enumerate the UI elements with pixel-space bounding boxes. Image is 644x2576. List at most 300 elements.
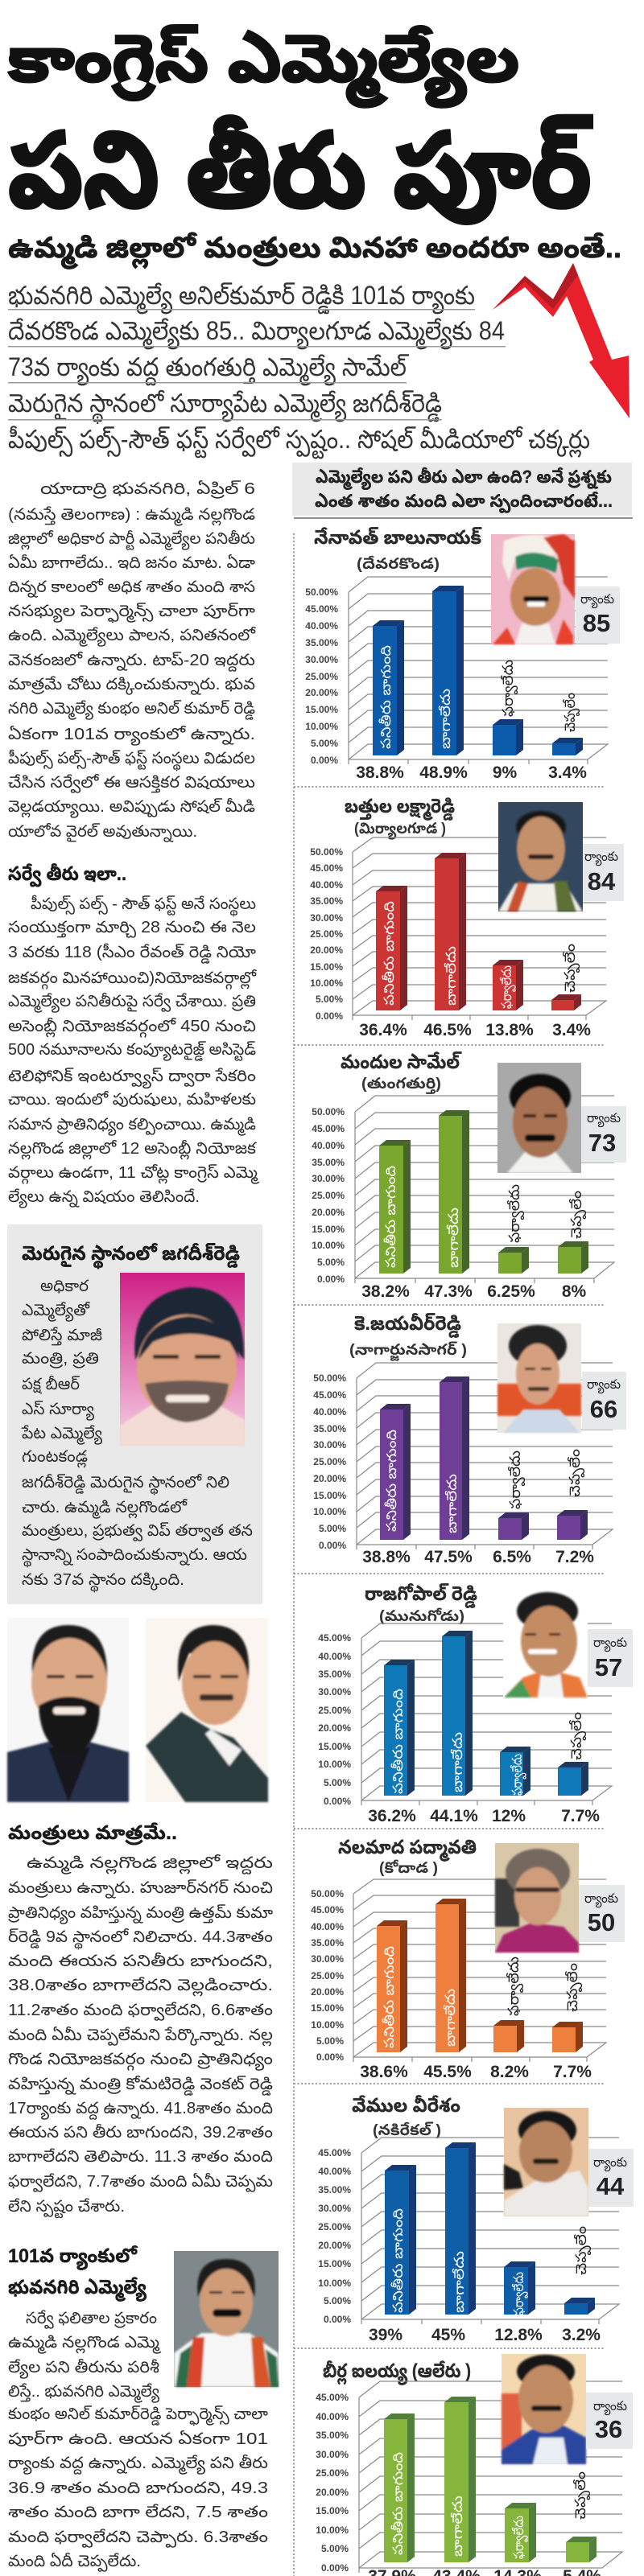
value labels: 36.4% bbox=[359, 1021, 407, 1039]
rank badge: ర్యాంకు bbox=[587, 1112, 621, 1128]
chart 2: Miryalaguda: 35.00% bbox=[310, 895, 343, 907]
chart 7: Nakrekal: 20.00% bbox=[318, 2240, 351, 2251]
chart 3: Thungathurthi: 5.00% bbox=[317, 1257, 345, 1268]
value labels bbox=[368, 1807, 600, 1825]
bars: ఫర్వాలేదు bbox=[506, 1184, 525, 1243]
chart 2: Miryalaguda: 20.00% bbox=[310, 944, 343, 956]
bars: బాగాలేదు bbox=[438, 689, 453, 749]
photo: Ilaiah bbox=[502, 2354, 586, 2464]
value labels bbox=[356, 763, 587, 782]
article survey text: జకవర్గం మినహాయించి)నియోజకవర్గాల్లో bbox=[8, 969, 257, 990]
text: Jagadish Reddy column: మంత్రి, ప్రతి bbox=[22, 1350, 99, 1368]
chart 1: Devarakonda: 25.00% bbox=[305, 671, 338, 682]
article intro text: యాదాద్రి భువనగిరి, ఏప్రిల్ 6 bbox=[40, 480, 255, 499]
icon: falling red arrow bbox=[493, 263, 630, 418]
bars: చెప్పలేం bbox=[567, 1449, 585, 1497]
heading bbox=[341, 1051, 462, 1094]
bars: బాగాలేదు bbox=[443, 1989, 458, 2047]
heading: rank 101 Bhuvanagiri MLA bbox=[8, 2245, 147, 2302]
deck headlines: మెరుగైన స్థానంలో సూర్యాపేట ఎమ్మెల్యే జగదీశ్‌రెడ్డి bbox=[8, 389, 442, 424]
photo: minister Uttam Kumar Reddy bbox=[7, 1618, 129, 1802]
chart 3: Thungathurthi: 50.00% bbox=[312, 1106, 345, 1117]
photo: Padmavathi bbox=[495, 1843, 579, 1953]
bars: పనితీరు బాగుంది bbox=[378, 645, 394, 749]
article ministers text: 38.0శాతం బాగాలేదని వెల్లడించారు. bbox=[8, 1977, 273, 1997]
chart 8: Aleru: 35.00% bbox=[316, 2430, 349, 2441]
chart 5: Munugode: 10.00% bbox=[318, 1759, 351, 1770]
text: Jagadish Reddy column: మంత్రులు, ప్రభుత్వ విప్ తర్వాత తన bbox=[22, 1522, 253, 1541]
article intro text: వెనకంజలో ఉన్నారు. టాప్-20 ఇద్దరు bbox=[8, 652, 255, 672]
chart 8: Aleru: 10.00% bbox=[316, 2525, 349, 2536]
chart 3: Thungathurthi: 10.00% bbox=[312, 1240, 345, 1251]
chart 2: Miryalaguda: 0.00% bbox=[316, 1010, 343, 1022]
chart 4: Nagarjuna Sagar: 35.00% bbox=[313, 1423, 346, 1434]
value labels: 38.8% bbox=[356, 763, 404, 782]
value labels: 38.8% bbox=[362, 1548, 411, 1566]
chart 5: Munugode: 5.00% bbox=[324, 1777, 351, 1788]
chart 2: Miryalaguda: 15.00% bbox=[310, 961, 343, 973]
article intro text: దిన్నర కాలంలో అధిక శాతం మంది శాస bbox=[8, 578, 255, 598]
chart 4: Nagarjuna Sagar: 45.00% bbox=[313, 1389, 346, 1401]
heading: మందుల సామేల్ bbox=[341, 1051, 462, 1073]
bars: ఫర్వాలేదు bbox=[510, 1754, 526, 1796]
bars: చెప్పలేం bbox=[568, 1191, 587, 1239]
article ministers text: మంది ఈయన పనితీరు బాగుందని, bbox=[8, 1952, 273, 1970]
bars: ఫర్వాలేదు bbox=[506, 1957, 524, 2016]
bars: ఫర్వాలేదు bbox=[511, 2272, 528, 2315]
chart 4: Nagarjuna Sagar bbox=[313, 1313, 626, 1566]
chart 8: Aleru: 30.00% bbox=[316, 2449, 349, 2460]
bars: పనితీరు బాగుంది bbox=[382, 901, 397, 1006]
chart 4: Nagarjuna Sagar: 15.00% bbox=[313, 1490, 346, 1501]
rank badge bbox=[586, 2393, 633, 2449]
rank badge: 44 bbox=[597, 2172, 625, 2200]
article intro text: నగిరి ఎమ్మెల్యే కుంభం అనిల్ కుమార్ రెడ్డి bbox=[8, 700, 255, 720]
text: Jagadish Reddy column: అధికార bbox=[40, 1278, 89, 1295]
deck headlines bbox=[8, 281, 590, 459]
chart 1: Devarakonda: 50.00% bbox=[305, 586, 338, 598]
heading: కె.జయవీర్‌రెడ్డి bbox=[354, 1313, 461, 1338]
chart 8: Aleru: 20.00% bbox=[316, 2487, 349, 2498]
article rank 101 text: పూర్‌గా ఉంది. ఆయన ఏకంగా 101 bbox=[8, 2430, 268, 2448]
rank badge: ర్యాంకు bbox=[593, 1636, 627, 1652]
article ministers text: ఫర్వాలేదని, 7.7శాతం మంది ఏమీ చెప్పమ bbox=[8, 2172, 273, 2192]
value labels: 38.6% bbox=[360, 2063, 408, 2081]
rank badge: ర్యాంకు bbox=[593, 2156, 627, 2172]
article ministers text: ర్‌రెడ్డి 9వ స్థానంలో నిలిచారు. 44.3శాతం bbox=[8, 1928, 273, 1950]
article rank 101 text: ఉమ్మడి నల్లగొండ ఎమ్మె bbox=[8, 2334, 162, 2354]
article ministers text bbox=[7, 1854, 273, 2219]
value labels: 3.2% bbox=[562, 2326, 601, 2344]
chart 3: Thungathurthi: 35.00% bbox=[312, 1157, 345, 1168]
chart 4: Nagarjuna Sagar: 30.00% bbox=[313, 1439, 346, 1451]
chart 2: Miryalaguda: 5.00% bbox=[316, 994, 343, 1005]
value labels: 38.2% bbox=[361, 1282, 410, 1301]
heading: survey: సర్వే తీరు ఇలా.. bbox=[8, 863, 126, 887]
chart 4: Nagarjuna Sagar: 25.00% bbox=[313, 1456, 346, 1467]
chart 4: Nagarjuna Sagar: 0.00% bbox=[319, 1540, 346, 1551]
panel: survey question banner: ఎంత శాతం మంది ఎలా స్పందించారంటే... bbox=[315, 491, 613, 513]
chart 2: Miryalaguda: 50.00% bbox=[310, 846, 343, 858]
rank badge bbox=[588, 2149, 634, 2207]
chart 3: Thungathurthi: 25.00% bbox=[312, 1190, 345, 1201]
bars bbox=[377, 1899, 583, 2052]
value labels: 45% bbox=[431, 2326, 465, 2344]
chart 1: Devarakonda: 20.00% bbox=[305, 687, 338, 698]
title bbox=[8, 23, 592, 229]
article survey text: అసెంబ్లీ నియోజకవర్గంలో 450 నుంచి bbox=[8, 1017, 256, 1038]
article rank 101 text: సర్వే ఫలితాల ప్రకారం bbox=[26, 2310, 157, 2329]
bars: చెప్పలేం bbox=[573, 2226, 592, 2275]
text: Jagadish Reddy column: చారు. ఉమ్మడి నల్లగొండలో bbox=[22, 1499, 188, 1519]
deck headlines: దేవరకొండ ఎమ్మెల్యేకు 85.. మిర్యాలగూడ ఎమ్మెల్యేకు 84 bbox=[8, 316, 505, 350]
rank badge: 84 bbox=[588, 867, 616, 895]
value labels: 9% bbox=[493, 763, 517, 782]
article intro text: నసభ్యుల పెర్ఫార్మెన్స్ చాలా పూర్‌గా bbox=[8, 603, 256, 623]
rank badge: ర్యాంకు bbox=[593, 2400, 627, 2416]
heading bbox=[314, 527, 482, 573]
chart 4: Nagarjuna Sagar: 40.00% bbox=[313, 1406, 346, 1418]
article intro text: ఏకంగా 101వ ర్యాంకులో ఉన్నారు. bbox=[8, 726, 255, 746]
chart 8: Aleru bbox=[316, 2354, 633, 2576]
text: Jagadish Reddy column: పక్ష బీఆర్ bbox=[22, 1375, 80, 1394]
chart 4: Nagarjuna Sagar: 10.00% bbox=[313, 1506, 346, 1517]
article rank 101 text: శాతం మంది బాగా లేదని, 7.5 శాతం bbox=[8, 2504, 268, 2521]
article ministers text: మంది ఏమీ చెప్పలేమని పేర్కొన్నారు. నల్ల bbox=[8, 2026, 273, 2047]
article survey text: 500 నమూనాలను కంప్యూటరైజ్డ్ అసిస్టెడ్ bbox=[8, 1041, 256, 1061]
rank badge bbox=[582, 1372, 626, 1430]
rank badge: 50 bbox=[588, 1908, 615, 1936]
rank badge: 73 bbox=[588, 1129, 616, 1157]
chart 3: Thungathurthi: 30.00% bbox=[312, 1173, 345, 1184]
bars bbox=[384, 2397, 597, 2562]
article intro text: మాత్రమే చోటు దక్కించుకున్నారు. భువ bbox=[8, 676, 255, 695]
bars: ఫర్వాలేదు bbox=[511, 2516, 528, 2559]
chart 2: Miryalaguda: 30.00% bbox=[310, 912, 343, 924]
heading bbox=[349, 1313, 467, 1361]
chart 6: Kodad: 0.00% bbox=[316, 2051, 344, 2063]
title: పని తీరు పూర్ bbox=[8, 112, 592, 229]
bars: ఫర్వాలేదు bbox=[500, 660, 518, 717]
heading bbox=[352, 2095, 460, 2139]
subtitle: ఉమ్మడి జిల్లాలో మంత్రులు మినహా అందరూ అంతే.. bbox=[8, 231, 621, 270]
value labels bbox=[362, 1548, 594, 1566]
chart 5: Munugode: 45.00% bbox=[318, 1632, 351, 1644]
article survey text: సంయుక్తంగా మార్చి 28 నుంచి ఈ నెల bbox=[8, 919, 256, 938]
article rank 101 text: ర్యాంకు వద్ద ఉన్నారు. ఎమ్మెల్యే పని తీరు bbox=[8, 2454, 268, 2475]
chart 3: Thungathurthi: 20.00% bbox=[312, 1207, 345, 1218]
heading: బత్తుల లక్ష్మారెడ్డి bbox=[345, 796, 455, 821]
article survey text: ల్యేలు ఉన్న విషయం తెలిసిందే. bbox=[8, 1188, 200, 1208]
article survey text: వర్గాలు ఉండగా, 11 చోట్ల కాంగ్రెస్ ఎమ్మె bbox=[8, 1164, 260, 1184]
chart 8: Aleru: 25.00% bbox=[316, 2467, 349, 2479]
heading: rank 101 Bhuvanagiri MLA: 101వ ర్యాంకులో bbox=[8, 2245, 138, 2270]
chart 7: Nakrekal: 40.00% bbox=[318, 2166, 351, 2177]
chart 8: Aleru: 5.00% bbox=[321, 2543, 349, 2554]
chart 1: Devarakonda: 10.00% bbox=[305, 721, 338, 732]
chart 8: Aleru: 45.00% bbox=[316, 2392, 349, 2403]
chart 7: Nakrekal: 25.00% bbox=[318, 2221, 351, 2232]
value labels: 3.4% bbox=[552, 1021, 591, 1039]
value labels bbox=[368, 2567, 601, 2576]
article survey text: ఎమ్మెల్యేల పనితీరుపై సర్వే చేశాయి. ప్రతి bbox=[8, 992, 256, 1013]
article rank 101 text: కుంభం అనిల్ కుమార్‌రెడ్డి పెర్ఫార్మెన్స్ చాలా bbox=[8, 2405, 268, 2426]
bars: ఫర్వాలేదు bbox=[499, 965, 516, 1009]
photo: Balu Naik bbox=[491, 534, 575, 644]
article survey text: 3 వరకు 118 (సీఎం రేవంత్ రెడ్డి నియో bbox=[8, 943, 256, 964]
chart 5: Munugode: 40.00% bbox=[318, 1651, 351, 1662]
article ministers text: 11.2శాతం మంది ఫర్వాలేదని, 6.6శాతం bbox=[8, 2002, 273, 2021]
article intro text: ఉంది. ఎమ్మెల్యేలు పాలన, పనితనంలో bbox=[8, 627, 256, 647]
rank badge: 66 bbox=[590, 1395, 617, 1423]
photo: Samel bbox=[497, 1063, 581, 1173]
article rank 101 text: ల్యేల పని తీరును పరిశీ bbox=[8, 2358, 159, 2379]
value labels: 6.5% bbox=[493, 1548, 531, 1566]
chart 1: Devarakonda: 0.00% bbox=[311, 755, 338, 766]
article survey text: టెలిఫోనిక్ ఇంటర్వ్యూస్ ద్వారా సేకరిం bbox=[8, 1068, 256, 1089]
heading bbox=[338, 1837, 477, 1877]
article rank 101 text: మంది ఫర్వాలేదని చెప్పారు. 6.3శాతం bbox=[8, 2529, 268, 2548]
title: కాంగ్రెస్ ఎమ్మెల్యేల bbox=[8, 23, 519, 108]
heading: ministers only: మంత్రులు మాత్రమే.. bbox=[8, 1822, 177, 1846]
deck headlines: భువనగిరి ఎమ్మెల్యే అనిల్‌కుమార్ రెడ్డికి 101వ ర్యాంకు bbox=[8, 281, 475, 315]
value labels: 48.9% bbox=[419, 763, 468, 782]
article intro text: యాలోవ వైరల్ అవుతున్నాయి. bbox=[8, 823, 197, 842]
bars bbox=[385, 2142, 595, 2315]
value labels: 7.2% bbox=[555, 1548, 594, 1566]
value labels bbox=[359, 1021, 591, 1039]
bars: బాగాలేదు bbox=[444, 1474, 460, 1533]
bars: పనితీరు బాగుంది bbox=[390, 2452, 406, 2555]
rank badge: ర్యాంకు bbox=[587, 1378, 621, 1394]
value labels: 8% bbox=[562, 1282, 586, 1301]
heading: (తుంగతుర్తి) bbox=[361, 1076, 441, 1094]
value labels: 47.3% bbox=[424, 1282, 473, 1301]
chart 7: Nakrekal: 45.00% bbox=[318, 2147, 351, 2158]
photo: Jaiveer Reddy bbox=[497, 1323, 581, 1433]
chart 4: Nagarjuna Sagar: 20.00% bbox=[313, 1473, 346, 1484]
article intro text: జిల్లాలో అధికార పార్టీ ఎమ్మెల్యేల పనితీరు bbox=[8, 529, 255, 550]
text: Jagadish Reddy column: ఎమ్మెల్యేతో bbox=[22, 1302, 90, 1322]
chart 6: Kodad: 25.00% bbox=[311, 1970, 344, 1981]
article survey text: నల్లగొండ జిల్లాలో 12 అసెంబ్లీ నియోజక bbox=[8, 1139, 258, 1160]
article rank 101 text: లిస్తే.. భువనగిరి ఎమ్మెల్యే bbox=[8, 2383, 160, 2403]
heading bbox=[345, 796, 455, 840]
chart 3: Thungathurthi: 45.00% bbox=[312, 1123, 345, 1134]
rank badge: 36 bbox=[595, 2415, 622, 2443]
heading: (దేవరకొండ) bbox=[357, 555, 440, 573]
value labels bbox=[361, 1282, 586, 1301]
bars: బాగాలేదు bbox=[444, 946, 459, 1006]
dotted dividers bbox=[294, 533, 604, 2576]
article rank 101 text: మంది ఏదీ చెప్పలేదు. bbox=[8, 2553, 141, 2572]
bars: చెప్పలేం bbox=[564, 1963, 583, 2012]
article rank 101 text: 36.9 శాతం మంది బాగుందని, 49.3 bbox=[8, 2479, 268, 2497]
chart 1: Devarakonda: 5.00% bbox=[311, 738, 338, 749]
chart 1: Devarakonda bbox=[305, 527, 620, 782]
text: Jagadish Reddy column: గుంటకండ్ల bbox=[22, 1448, 88, 1468]
bars: బాగాలేదు bbox=[450, 2496, 465, 2557]
heading: రాజగోపాల్ రెడ్డి bbox=[365, 1583, 477, 1608]
text: Jagadish Reddy column: పోలిస్తే మాజీ bbox=[22, 1327, 102, 1346]
chart 7: Nakrekal: 10.00% bbox=[318, 2278, 351, 2289]
chart 3: Thungathurthi: 15.00% bbox=[312, 1224, 345, 1235]
chart 7: Nakrekal: 0.00% bbox=[324, 2314, 351, 2325]
article survey text: చాయి. ఇందులో పురుషులు, మహిళలకు bbox=[8, 1091, 256, 1109]
chart 6: Kodad: 40.00% bbox=[311, 1921, 344, 1932]
chart 6: Kodad: 30.00% bbox=[311, 1953, 344, 1965]
article intro text bbox=[8, 480, 256, 842]
heading: వేముల వీరేశం bbox=[352, 2095, 460, 2117]
chart 2: Miryalaguda: 40.00% bbox=[310, 879, 343, 891]
chart 6: Kodad: 10.00% bbox=[311, 2019, 344, 2031]
photo: minister Komatireddy Venkat Reddy bbox=[146, 1618, 268, 1802]
article survey text bbox=[8, 895, 260, 1208]
chart 4: Nagarjuna Sagar: 5.00% bbox=[319, 1523, 346, 1534]
heading: rank 101 Bhuvanagiri MLA: భువనగిరి ఎమ్మెల్యే bbox=[8, 2277, 147, 2302]
chart 7: Nakrekal: 30.00% bbox=[318, 2203, 351, 2214]
bars: చెప్పలేం bbox=[562, 944, 580, 993]
heading: బీర్ల ఐలయ్య (ఆలేరు ) bbox=[323, 2360, 471, 2385]
value labels: 12% bbox=[492, 1807, 526, 1825]
article ministers text: ఈయన పని తీరు బాగుందని, 39.2శాతం bbox=[8, 2123, 273, 2142]
bars bbox=[384, 1631, 588, 1796]
deck headlines: పీపుల్స్ పల్స్-సౌత్ ఫస్ట్ సర్వేలో స్పష్టం.. సోషల్ మీడియాలో చక్కర్లు bbox=[8, 425, 590, 459]
chart 3: Thungathurthi bbox=[312, 1051, 626, 1301]
bars: బాగాలేదు bbox=[446, 1208, 461, 1268]
value labels: 12.8% bbox=[494, 2326, 543, 2344]
chart 5: Munugode: 25.00% bbox=[318, 1705, 351, 1716]
article ministers text: ప్రాతినిధ్యం వహిస్తున్న మంత్రి ఉత్తమ్ కుమా bbox=[7, 1904, 273, 1924]
value labels: 47.5% bbox=[424, 1548, 473, 1566]
text: Jagadish Reddy column: జగదీశ్‌రెడ్డి మెరుగైన స్థానంలో నిలి bbox=[22, 1474, 229, 1496]
chart 6: Kodad: 5.00% bbox=[316, 2035, 344, 2047]
chart 1: Devarakonda: 40.00% bbox=[305, 620, 338, 632]
chart 1: Devarakonda: 30.00% bbox=[305, 654, 338, 665]
article intro text: (నమస్తే తెలంగాణ) : ఉమ్మడి నల్లగొండ bbox=[8, 506, 255, 526]
bars: చెప్పలేం bbox=[568, 1712, 587, 1760]
value labels: 7.7% bbox=[561, 1807, 600, 1825]
panel: survey question banner bbox=[292, 463, 633, 519]
value labels: 45.5% bbox=[423, 2063, 472, 2081]
rank badge bbox=[576, 586, 620, 644]
chart 8: Aleru: 40.00% bbox=[316, 2411, 349, 2422]
chart 6: Kodad: 35.00% bbox=[311, 1937, 344, 1948]
chart 8: Aleru: 0.00% bbox=[321, 2562, 349, 2574]
value labels: 3.4% bbox=[548, 763, 587, 782]
value labels: 46.5% bbox=[423, 1021, 472, 1039]
deck headlines: 73వ ర్యాంకు వద్ద తుంగతుర్తి ఎమ్మెల్యే సామేల్ bbox=[8, 352, 410, 386]
chart 5: Munugode: 0.00% bbox=[324, 1796, 351, 1807]
rank badge bbox=[581, 1106, 626, 1162]
heading: (మిర్యాలగూడ ) bbox=[354, 821, 446, 840]
rank badge: ర్యాంకు bbox=[580, 593, 614, 609]
heading: (కోదాడ ) bbox=[379, 1859, 438, 1877]
article ministers text: లేని స్పష్టం చేశారు. bbox=[8, 2198, 125, 2219]
chart 7: Nakrekal bbox=[318, 2095, 634, 2344]
heading bbox=[365, 1583, 477, 1625]
heading: (మునుగోడు) bbox=[379, 1607, 464, 1625]
chart 7: Nakrekal: 15.00% bbox=[318, 2258, 351, 2269]
rank badge bbox=[588, 1629, 633, 1687]
bars: బాగాలేదు bbox=[450, 1732, 465, 1792]
bars: చెప్పలేం bbox=[562, 693, 580, 732]
value labels: 8.2% bbox=[490, 2063, 529, 2081]
rank badge: 85 bbox=[583, 609, 610, 637]
chart 1: Devarakonda: 45.00% bbox=[305, 603, 338, 615]
rank badge bbox=[579, 1885, 625, 1942]
chart 8: Aleru: 15.00% bbox=[316, 2505, 349, 2516]
chart 1: Devarakonda: 35.00% bbox=[305, 637, 338, 648]
article intro text: చేసిన సర్వేలో ఈ ఆసక్తికర విషయాలు bbox=[8, 774, 255, 793]
rank badge: 57 bbox=[595, 1653, 622, 1681]
bars: ఫర్వాలేదు bbox=[507, 1451, 526, 1509]
chart 2: Miryalaguda: 45.00% bbox=[310, 862, 343, 874]
article intro text: వెల్లడయ్యాయి. అవిప్పుడు సోషల్ మీడి bbox=[8, 797, 255, 818]
chart 1: Devarakonda: 15.00% bbox=[305, 704, 338, 715]
panel: Jagadish Reddy box bbox=[7, 1224, 262, 1604]
bars bbox=[379, 1110, 588, 1274]
chart 2: Miryalaguda bbox=[310, 796, 624, 1039]
bars: బాగాలేదు bbox=[452, 2251, 467, 2313]
chart 7: Nakrekal: 35.00% bbox=[318, 2184, 351, 2195]
bars bbox=[373, 586, 583, 755]
value labels: 39% bbox=[369, 2326, 402, 2344]
chart 5: Munugode: 30.00% bbox=[318, 1686, 351, 1697]
bars bbox=[376, 853, 581, 1010]
value labels: 6.25% bbox=[487, 1282, 535, 1301]
value labels: 36.2% bbox=[368, 1807, 416, 1825]
chart 6: Kodad bbox=[311, 1837, 625, 2081]
chart 2: Miryalaguda: 25.00% bbox=[310, 928, 343, 940]
text: Jagadish Reddy column: స్థానాన్ని సంపాదించుకున్నారు. ఆయ bbox=[22, 1546, 247, 1568]
article rank 101 text bbox=[8, 2310, 268, 2572]
chart 6: Kodad: 45.00% bbox=[311, 1904, 344, 1916]
article intro text: ఏమీ బాగాలేదు.. ఇది జనం మాట. ఏడా bbox=[8, 553, 256, 572]
article ministers text: మంత్రులు ఉన్నారు. హుజూర్‌నగర్ నుంచి bbox=[8, 1879, 273, 1899]
article intro text: పీపుల్స్ పల్స్-సౌత్ ఫస్ట్ సంస్థలు విడుదల bbox=[8, 749, 255, 772]
photo: Jagadish Reddy bbox=[120, 1273, 245, 1446]
chart 5: Munugode bbox=[318, 1583, 633, 1825]
chart 4: Nagarjuna Sagar: 50.00% bbox=[313, 1372, 346, 1384]
heading: (నకిరేకల్ ) bbox=[373, 2121, 441, 2139]
bars: పనితీరు బాగుంది bbox=[383, 1166, 398, 1268]
article ministers text: గొండ నియోజకవర్గం నుంచి ప్రాతినిధ్యం bbox=[8, 2051, 273, 2071]
bars: పనితీరు బాగుంది bbox=[382, 1946, 397, 2048]
panel: survey question banner: ఎమ్మెల్యేల పని తీరు ఎలా ఉంది? అనే ప్రశ్నకు bbox=[316, 467, 612, 490]
value labels bbox=[369, 2326, 601, 2344]
article survey text: సమాన ప్రాతినిధ్యం కల్పించాయి. ఉమ్మడి bbox=[8, 1116, 256, 1136]
bars bbox=[380, 1376, 588, 1540]
value labels: 13.8% bbox=[485, 1021, 534, 1039]
heading: నేనావత్ బాలునాయక్ bbox=[314, 527, 482, 549]
text: Jagadish Reddy column: ఎస్ సూర్యా bbox=[22, 1401, 95, 1421]
value labels: 44.1% bbox=[430, 1807, 478, 1825]
chart 7: Nakrekal: 5.00% bbox=[324, 2295, 351, 2306]
chart 6: Kodad: 20.00% bbox=[311, 1986, 344, 1998]
heading: నలమాద పద్మావతి bbox=[338, 1837, 477, 1862]
chart 3: Thungathurthi: 0.00% bbox=[317, 1274, 345, 1285]
chart 2: Miryalaguda: 10.00% bbox=[310, 977, 343, 989]
article ministers text: 17ర్యాంకు వద్ద ఉన్నారు. 41.8శాతం మంది bbox=[8, 2100, 273, 2120]
article ministers text: ఉమ్మడి నల్లగొండ జిల్లాలో ఇద్దరు bbox=[27, 1854, 273, 1874]
text: Jagadish Reddy column bbox=[21, 1278, 253, 1593]
article ministers text: బాగాలేదని తెలిపారు. 11.3 శాతం మంది bbox=[8, 2148, 273, 2166]
chart 6: Kodad: 50.00% bbox=[311, 1888, 344, 1899]
chart 5: Munugode: 35.00% bbox=[318, 1669, 351, 1680]
bars: పనితీరు బాగుంది bbox=[390, 2208, 406, 2313]
chart 3: Thungathurthi: 40.00% bbox=[312, 1140, 345, 1151]
